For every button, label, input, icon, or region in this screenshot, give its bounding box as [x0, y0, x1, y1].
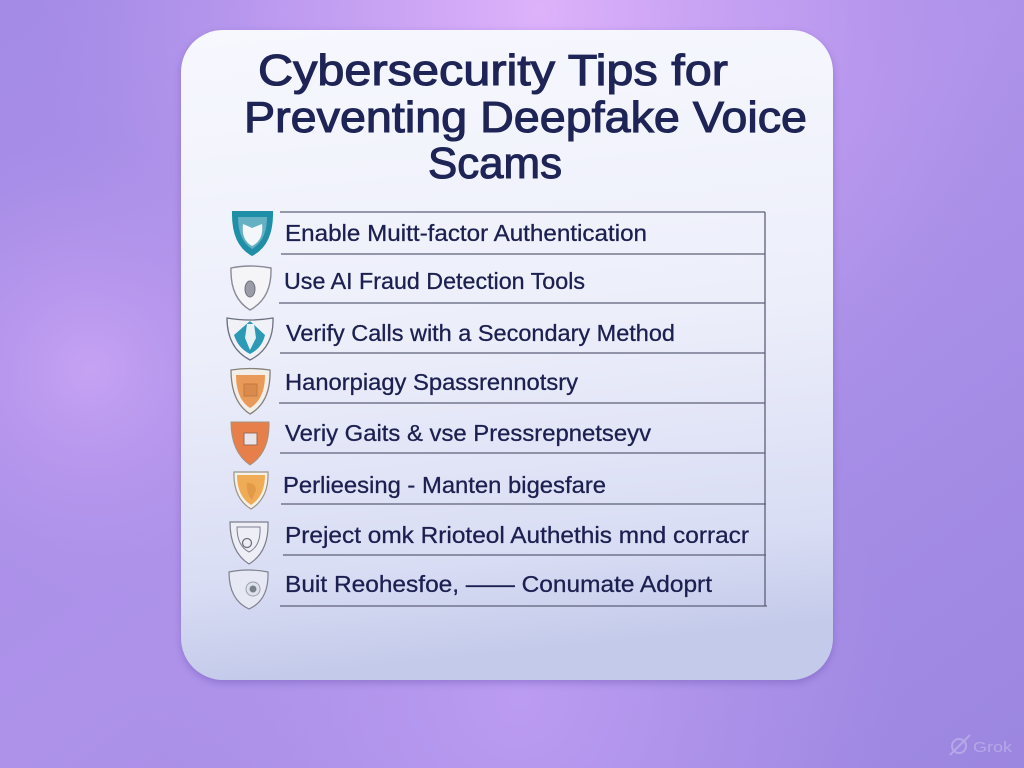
tip 7	[230, 522, 749, 564]
tips table	[227, 211, 767, 609]
icon: outline shield with target	[229, 570, 268, 609]
icon: grey shield with oval	[231, 266, 271, 310]
icon: outline shield with circle	[230, 522, 268, 564]
tip 6	[234, 472, 606, 509]
panel: tips card	[181, 30, 833, 683]
tip 7: Preject omk Rrioteol Authethis mnd corracr	[285, 522, 749, 548]
tip 5: Veriy Gaits & vse Pressrepnetseyv	[285, 420, 652, 446]
tip 3	[227, 318, 675, 360]
icon: deep orange shield	[231, 422, 269, 465]
tip 8: Buit Reohesfoe, —— Conumate Adoprt	[285, 571, 713, 597]
tip 8	[229, 570, 713, 609]
tip 2: Use AI Fraud Detection Tools	[284, 268, 585, 294]
tip 4: Hanorpiagy Spassrennotsry	[285, 369, 579, 395]
tip 1	[232, 211, 647, 256]
icon: teal shield with outline	[227, 318, 273, 360]
tip 6: Perlieesing - Manten bigesfare	[283, 472, 606, 498]
title: Scams	[428, 139, 562, 188]
tip 5	[231, 420, 652, 465]
title: Preventing Deepfake Voice	[244, 93, 807, 142]
title	[244, 46, 807, 188]
tip 1: Enable Muitt-factor Authentication	[285, 220, 647, 246]
watermark: Grok logo	[950, 735, 1013, 756]
tip 4	[231, 368, 579, 414]
title: Cybersecurity Tips for	[258, 46, 728, 95]
tip 2	[231, 266, 585, 310]
watermark: Grok logo: Grok	[973, 739, 1013, 756]
icon: amber shield	[234, 472, 268, 509]
tip 3: Verify Calls with a Secondary Method	[286, 320, 675, 346]
icon: teal shield	[232, 211, 273, 256]
icon: orange shield	[231, 368, 270, 414]
